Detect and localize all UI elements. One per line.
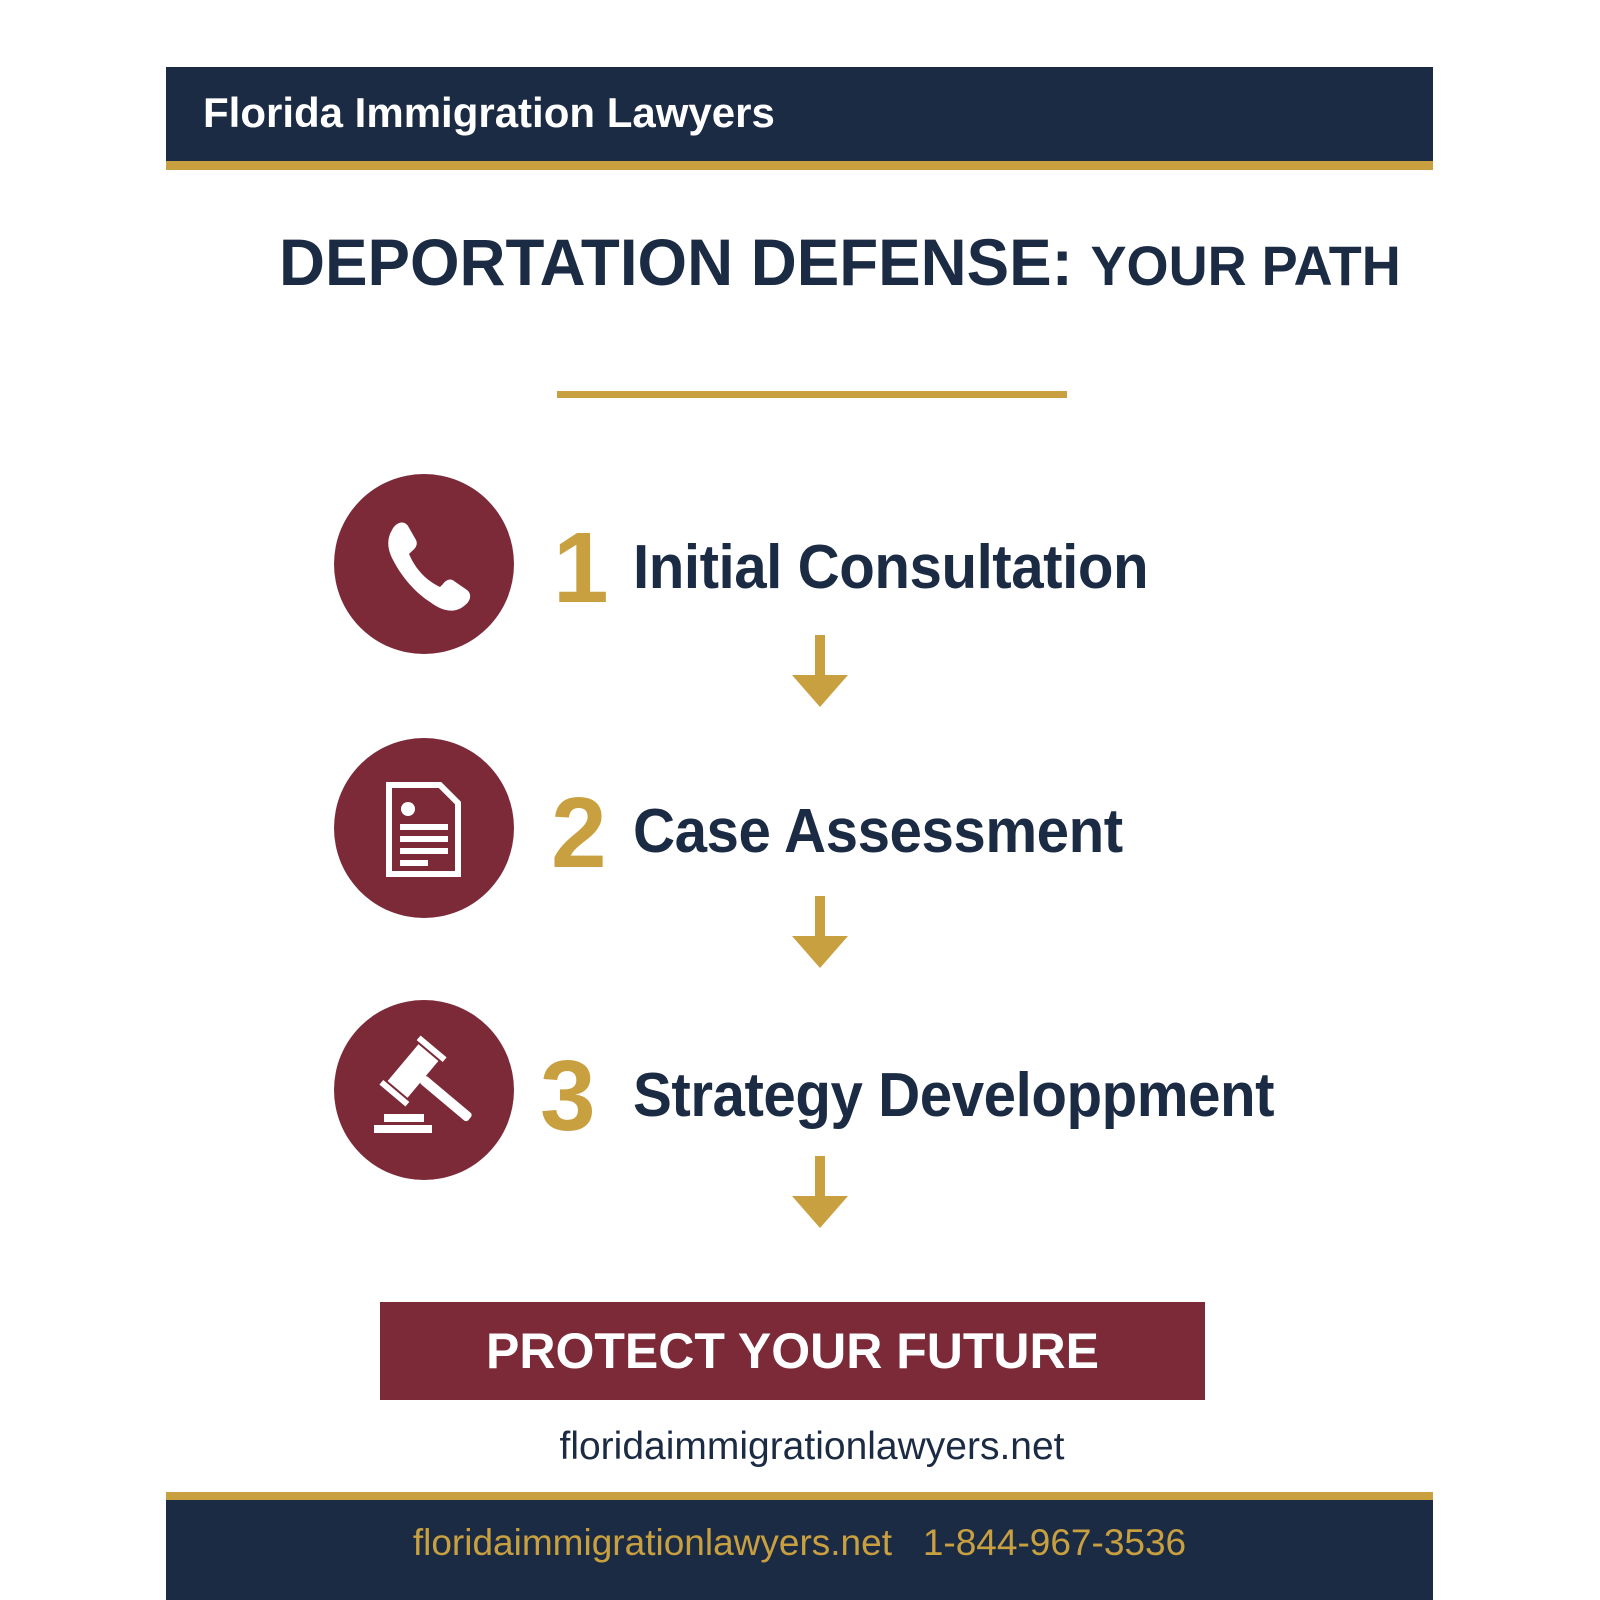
step label: Case Assessment (633, 797, 1123, 866)
number 2: 2 (551, 777, 607, 889)
icon: phone (334, 474, 514, 654)
arrow 3 (792, 1156, 848, 1228)
arrow 1 (792, 635, 848, 707)
icon: document (334, 738, 514, 918)
step 3 (334, 1000, 1274, 1180)
footer bar (166, 1492, 1433, 1600)
header bar (166, 67, 1433, 170)
number 1: 1 (553, 512, 609, 624)
footer contact: floridaimmigrationlawyers.net 1-844-967-3536 (413, 1522, 1186, 1563)
step 2 (334, 738, 1123, 918)
step label: Initial Consultation (633, 533, 1148, 602)
gold divider (557, 391, 1067, 398)
website text: floridaimmigrationlawyers.net (559, 1425, 1065, 1468)
number 3: 3 (540, 1040, 596, 1152)
step label: Strategy Developpment (633, 1061, 1274, 1130)
icon: gavel (334, 1000, 514, 1180)
title: DEPORTATION DEFENSE: YOUR PATH (279, 225, 1401, 299)
CTA banner: PROTECT YOUR FUTURE (486, 1323, 1099, 1379)
arrow 2 (792, 896, 848, 968)
header text: Florida Immigration Lawyers (203, 89, 775, 136)
step 1 (334, 474, 1148, 654)
CTA banner (380, 1302, 1205, 1400)
